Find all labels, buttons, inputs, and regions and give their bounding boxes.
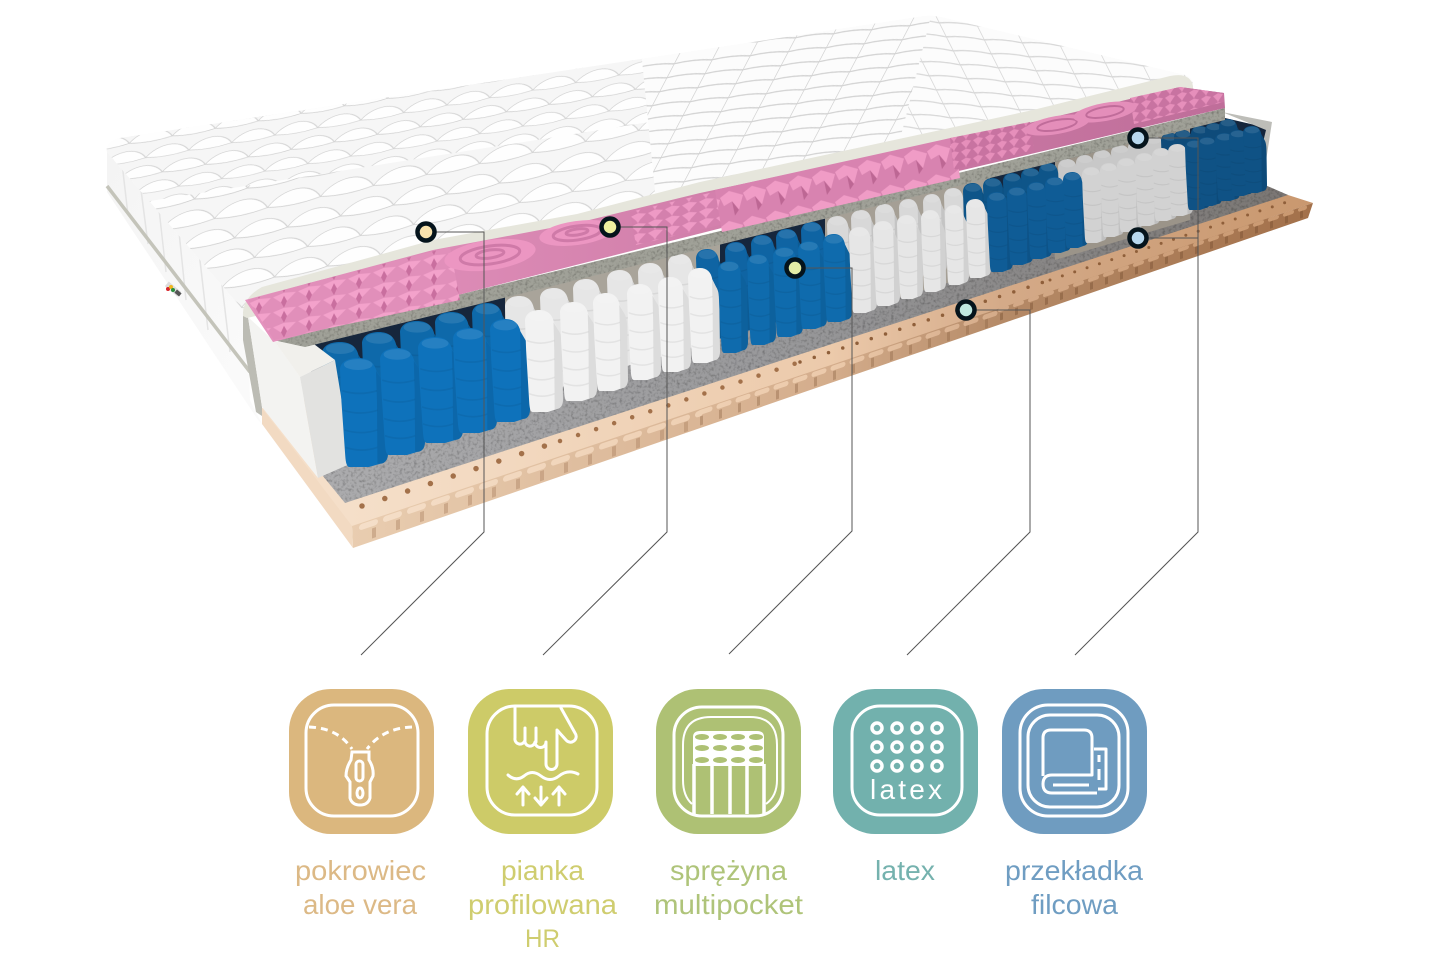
label: pokrowiec aloe vera <box>295 855 426 920</box>
logo tag on side <box>165 282 182 296</box>
callout: latex leader <box>907 302 1030 655</box>
back row of springs <box>322 119 1243 451</box>
latex layer <box>262 187 1313 548</box>
label: pianka profilowana HR: profilowana <box>468 889 617 920</box>
pink profiled HR foam <box>245 87 1225 342</box>
label: latex: latex <box>875 855 935 886</box>
label: sprezyna multipocket <box>654 855 803 920</box>
felt layer <box>318 185 1288 503</box>
quilted top cover <box>106 16 1192 308</box>
label: przekladka filcowa <box>1005 855 1143 920</box>
icon: latex <box>833 689 978 834</box>
blue pocket springs, section 1 <box>340 319 530 467</box>
callout: sprezyna leader <box>729 260 852 654</box>
callout: pokrowiec leader <box>361 224 484 655</box>
mattress side panel <box>107 150 262 424</box>
blue pocket springs, section 2 <box>718 234 852 353</box>
white pocket springs, section 3 <box>1082 144 1193 243</box>
label: przekladka filcowa: przekładka <box>1005 855 1143 886</box>
white pocket springs, section 1 <box>525 268 720 412</box>
cream lip under cover <box>243 75 1193 318</box>
label: sprezyna multipocket: sprężyna <box>670 855 787 886</box>
mattress illustration <box>90 0 1313 548</box>
white pocket springs, section 2 <box>849 199 991 313</box>
blue pocket springs, section 4 <box>1185 126 1267 210</box>
foam edge block <box>243 112 1272 478</box>
label: pokrowiec aloe vera: aloe vera <box>303 889 417 920</box>
label: pokrowiec aloe vera: pokrowiec <box>295 855 426 886</box>
label: pianka profilowana HR: HR <box>525 925 560 953</box>
icon: pocket springs <box>656 689 801 834</box>
icon: zipper cover <box>289 689 434 834</box>
grey felt band under pink foam <box>273 108 1225 347</box>
icon: latex: latex <box>870 774 942 805</box>
spiral ridges on foam <box>442 98 1138 276</box>
icon: felt spacer <box>1002 689 1147 834</box>
cavity behind springs <box>300 118 1268 440</box>
label: sprezyna multipocket: multipocket <box>654 889 803 920</box>
label: pianka profilowana HR: pianka <box>501 855 584 886</box>
blue pocket springs, section 3 <box>987 172 1088 272</box>
label: pianka profilowana HR <box>468 855 617 953</box>
callout: przekladka leaders <box>1075 130 1198 655</box>
label: przekladka filcowa: filcowa <box>1031 889 1118 920</box>
callout: pianka leader <box>543 218 667 655</box>
icon: profiled foam with hand <box>468 689 613 834</box>
